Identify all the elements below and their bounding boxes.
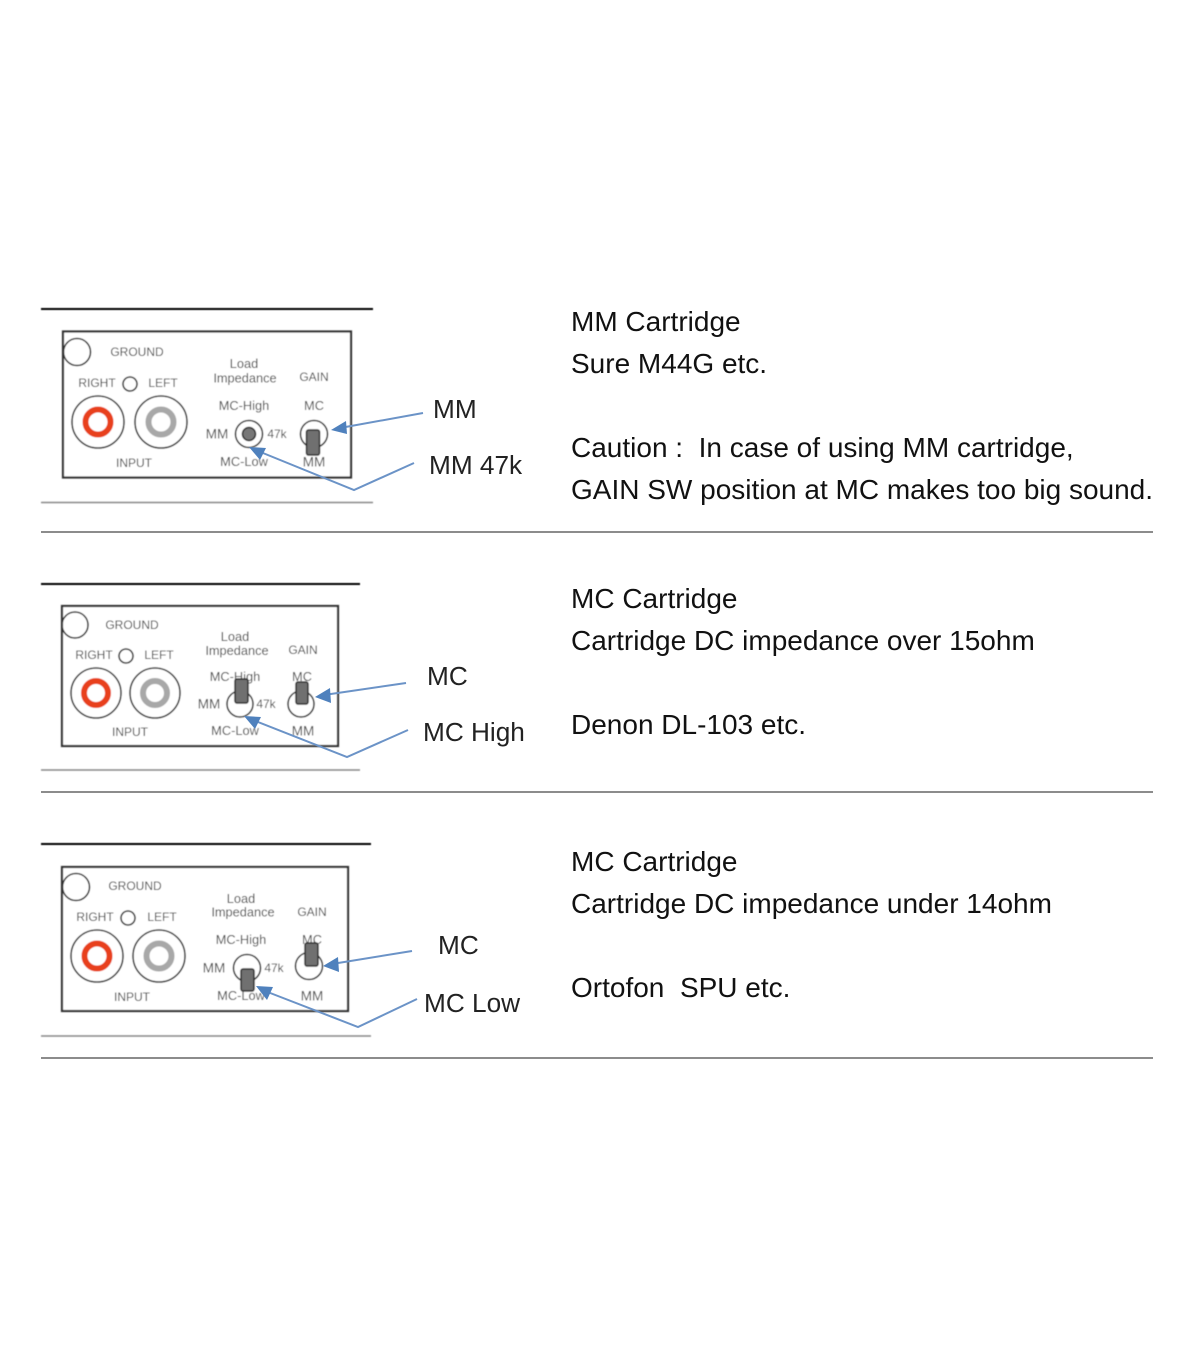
- diagram: rear panel set to MC High: Impedance: [205, 643, 269, 658]
- diagram: rear panel set to MC Low: MC-High: [216, 932, 266, 947]
- text block: MM cartridge notes: Sure M44G etc.: [571, 348, 767, 379]
- diagram: rear panel set to MC Low: INPUT: [114, 990, 151, 1004]
- panel: MC cartridge over 15 ohm: [41, 583, 1035, 770]
- diagram: rear panel set to MC High: MM: [198, 696, 220, 712]
- diagram: rear panel set to MC Low: MC: [302, 932, 322, 947]
- diagram: rear panel set to MM 47k: Impedance: [213, 370, 277, 386]
- diagram: rear panel set to MC High: LEFT: [144, 648, 174, 662]
- diagram: rear panel set to MC High: GROUND: [105, 618, 159, 632]
- arrow: to load impedance switch: [256, 986, 417, 1027]
- diagram: rear panel set to MC High: MC-Low: [211, 723, 260, 738]
- diagram: rear panel set to MM 47k: [41, 309, 373, 502]
- arrow: to gain switch: [315, 683, 406, 703]
- text block: MC over 15 ohm notes: MC Cartridge: [571, 583, 737, 614]
- diagram: rear panel set to MC High: MC-High: [210, 669, 260, 684]
- diagram: rear panel set to MM 47k: GAIN: [299, 370, 329, 384]
- arrow: to load impedance switch: [244, 716, 408, 757]
- diagram: rear panel set to MM 47k: RIGHT: [78, 376, 116, 390]
- diagram: rear panel set to MC High: GAIN: [288, 643, 318, 657]
- text block: MM cartridge notes: MM Cartridge: [571, 306, 741, 337]
- diagram: rear panel set to MM 47k: GROUND: [110, 345, 164, 359]
- diagram: rear panel set to MM 47k: MM: [303, 454, 325, 470]
- diagram: rear panel set to MC Low: MC-Low: [217, 988, 266, 1003]
- diagram: rear panel set to MC Low: GROUND: [108, 879, 162, 893]
- text block: MC under 14 ohm notes: Cartridge DC impedance under 14ohm: [571, 888, 1052, 919]
- diagram: rear panel set to MC Low: [41, 844, 371, 1036]
- label: MC Low: MC Low: [424, 988, 520, 1018]
- diagram: rear panel set to MM 47k: Load: [230, 356, 258, 371]
- diagram: rear panel set to MC Low: GAIN: [297, 905, 327, 919]
- arrow: to gain switch: [331, 413, 423, 434]
- diagram: rear panel set to MC Low: Impedance: [211, 904, 275, 920]
- label: MM 47k: MM 47k: [429, 450, 523, 480]
- diagram: rear panel set to MC High: MM: [292, 724, 314, 738]
- text block: MM cartridge notes: GAIN SW position at MC makes too big sound.: [571, 474, 1153, 505]
- arrow: to load impedance switch: [249, 447, 414, 490]
- text block: MC under 14 ohm notes: [571, 846, 1052, 1003]
- text block: MC over 15 ohm notes: Denon DL-103 etc.: [571, 709, 806, 740]
- text block: MC under 14 ohm notes: MC Cartridge: [571, 846, 737, 877]
- diagram: rear panel set to MC High: MC: [292, 669, 312, 684]
- arrow: to gain switch: [323, 951, 412, 972]
- diagram: rear panel set to MC Low: LEFT: [147, 910, 177, 924]
- diagram: rear panel set to MC Low: Load: [227, 891, 255, 906]
- diagram: rear panel set to MC Low: MM: [203, 960, 225, 976]
- text block: MM cartridge notes: Caution : In case of using MM cartridge,: [571, 432, 1074, 463]
- label: MC: MC: [427, 661, 468, 691]
- diagram: rear panel set to MC High: INPUT: [112, 725, 149, 739]
- panel: MC cartridge under 14 ohm: [41, 844, 1052, 1036]
- text block: MC over 15 ohm notes: Cartridge DC impedance over 15ohm: [571, 625, 1035, 656]
- label: MM: MM: [433, 394, 477, 424]
- panel: MM cartridge setting: [41, 306, 1153, 505]
- diagram: rear panel set to MC High: 47k: [256, 697, 277, 711]
- diagram: rear panel set to MM 47k: 47k: [267, 427, 288, 441]
- diagram: rear panel set to MM 47k: MM: [206, 426, 228, 442]
- diagram: rear panel set to MC High: Load: [221, 629, 249, 644]
- label: MC High: MC High: [423, 717, 525, 747]
- text block: MC under 14 ohm notes: Ortofon SPU etc.: [571, 972, 790, 1003]
- diagram: rear panel set to MM 47k: INPUT: [116, 456, 153, 470]
- diagram: rear panel set to MC High: [41, 584, 360, 770]
- diagram: rear panel set to MC Low: 47k: [264, 961, 285, 975]
- text block: MC over 15 ohm notes: [571, 583, 1035, 740]
- diagram: rear panel set to MC High: RIGHT: [75, 648, 113, 662]
- diagram: rear panel set to MM 47k: MC-High: [219, 398, 269, 413]
- diagram: rear panel set to MM 47k: MC: [304, 398, 324, 413]
- label: MC: MC: [438, 930, 479, 960]
- diagram: rear panel set to MM 47k: MC-Low: [220, 454, 269, 469]
- diagram: rear panel set to MM 47k: LEFT: [148, 376, 178, 390]
- text block: MM cartridge notes: [571, 306, 1153, 505]
- diagram: rear panel set to MC Low: RIGHT: [76, 910, 114, 924]
- diagram: rear panel set to MC Low: MM: [301, 988, 323, 1004]
